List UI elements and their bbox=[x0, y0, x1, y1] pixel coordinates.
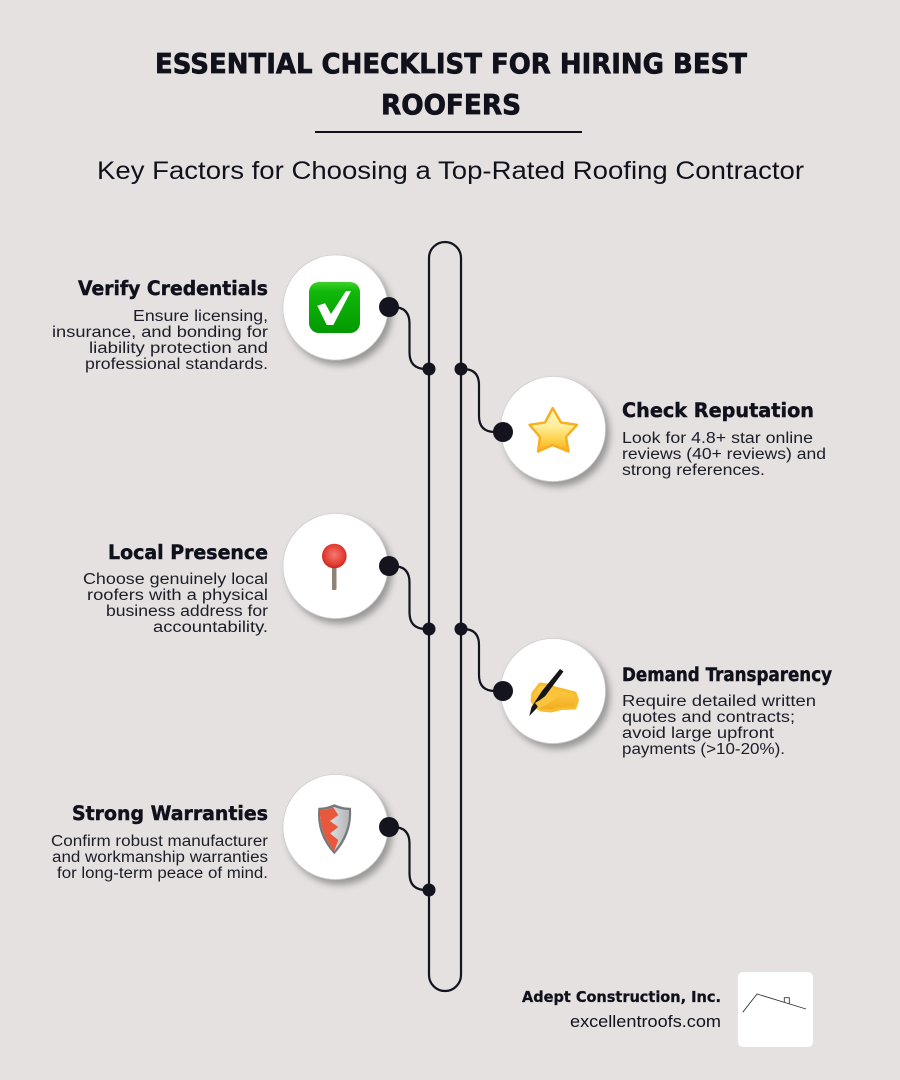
text: check reputation: reviews (40+ reviews) and bbox=[622, 446, 826, 463]
text: local presence: business address for bbox=[106, 603, 268, 620]
connector dot bbox=[493, 422, 513, 442]
text: demand transparency: avoid large upfront bbox=[622, 725, 775, 742]
icon: writing hand bbox=[500, 638, 606, 744]
text: check reputation: strong references. bbox=[622, 462, 765, 479]
heading: verify credentials: Verify Credentials bbox=[78, 277, 268, 300]
connector: demand transparency bbox=[461, 629, 503, 691]
heading: local presence: Local Presence bbox=[108, 541, 268, 564]
icon: green check mark bbox=[283, 255, 388, 360]
text: strong warranties: for long-term peace of mind. bbox=[57, 865, 268, 882]
text: local presence: roofers with a physical bbox=[87, 587, 268, 604]
icon: round pushpin bbox=[283, 514, 388, 618]
text: strong warranties: and workmanship warranties bbox=[52, 849, 268, 866]
connector: verify credentials bbox=[389, 307, 429, 369]
text: demand transparency bbox=[622, 693, 816, 758]
text: demand transparency: quotes and contracts; bbox=[622, 709, 795, 726]
footer company name: Adept Construction, Inc. bbox=[522, 988, 721, 1006]
heading: demand transparency: Demand Transparency bbox=[622, 665, 832, 686]
text: verify credentials: professional standards. bbox=[85, 356, 268, 373]
text: verify credentials: insurance, and bonding for bbox=[52, 324, 268, 341]
title: ESSENTIAL CHECKLIST FOR HIRING BEST bbox=[155, 48, 747, 80]
subtitle: Key Factors for Choosing a Top-Rated Roofing Contractor bbox=[97, 157, 804, 185]
connector dots on left cards bbox=[379, 297, 399, 837]
text: local presence: accountability. bbox=[153, 619, 268, 636]
connector: local presence bbox=[389, 566, 429, 629]
text: strong warranties: Confirm robust manufacturer bbox=[51, 833, 268, 850]
text: verify credentials: Ensure licensing, bbox=[133, 308, 268, 325]
panel: local presence bbox=[83, 514, 388, 636]
text: verify credentials bbox=[52, 308, 268, 373]
panel: strong warranties bbox=[51, 774, 388, 882]
heading: strong warranties: Strong Warranties bbox=[72, 802, 268, 825]
icon: star bbox=[500, 376, 606, 482]
text: demand transparency: payments (>10-20%). bbox=[622, 741, 785, 758]
central timeline pill bbox=[429, 242, 461, 991]
junction dots bbox=[422, 362, 468, 896]
text: local presence bbox=[83, 571, 268, 636]
footer website: excellentroofs.com bbox=[570, 1013, 721, 1031]
title bbox=[155, 48, 747, 121]
connector: check reputation bbox=[461, 369, 503, 432]
text: check reputation bbox=[622, 430, 826, 479]
text: strong warranties bbox=[51, 833, 268, 882]
panel: check reputation bbox=[493, 376, 826, 482]
heading: check reputation: Check Reputation bbox=[622, 399, 814, 422]
text: demand transparency: Require detailed written bbox=[622, 693, 816, 710]
title underline bbox=[315, 131, 582, 133]
icon: shield bbox=[283, 774, 388, 880]
text: check reputation: Look for 4.8+ star online bbox=[622, 430, 813, 447]
text: local presence: Choose genuinely local bbox=[83, 571, 268, 588]
connector dot bbox=[493, 681, 513, 701]
panel: verify credentials bbox=[52, 255, 388, 373]
panel: demand transparency bbox=[493, 638, 832, 758]
connector: strong warranties bbox=[389, 827, 429, 890]
text: verify credentials: liability protection and bbox=[89, 340, 268, 357]
title: ROOFERS bbox=[381, 89, 521, 121]
logo bbox=[738, 972, 813, 1047]
